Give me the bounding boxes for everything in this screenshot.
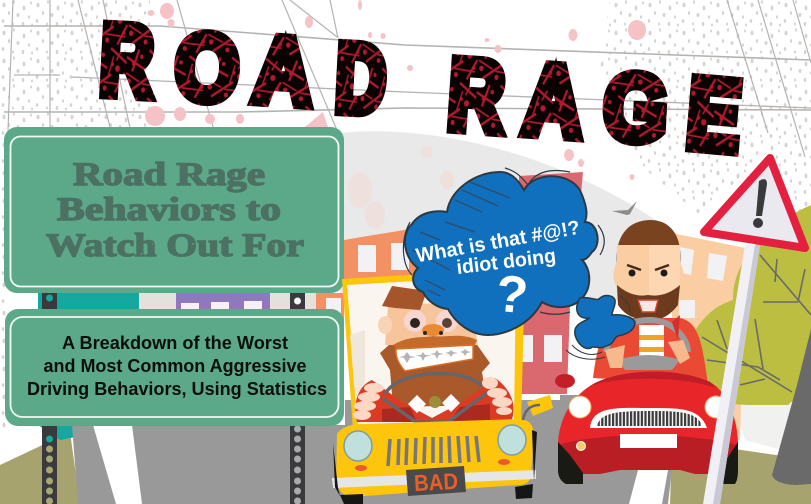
left sign post bbox=[42, 293, 57, 504]
subtitle text: A Breakdown of the Worst bbox=[62, 333, 288, 353]
main title: G bbox=[601, 53, 670, 162]
subtitle text bbox=[27, 333, 327, 399]
bird bbox=[612, 201, 637, 215]
main title: O bbox=[173, 14, 241, 121]
buildings row bbox=[38, 172, 745, 440]
motion lines bbox=[403, 168, 604, 314]
subtitle text: Driving Behaviors, Using Statistics bbox=[27, 379, 327, 399]
hood dark rim bbox=[590, 372, 716, 388]
shirt stripes bbox=[639, 335, 664, 352]
beard bbox=[617, 285, 680, 320]
eyebrows bbox=[627, 265, 669, 270]
arm strap bbox=[672, 315, 680, 340]
wheels bbox=[333, 430, 537, 504]
shirt bands bbox=[382, 404, 490, 422]
lower body bbox=[558, 435, 738, 474]
car hood bbox=[558, 372, 738, 460]
mouth bbox=[638, 300, 658, 312]
warning triangle sign bbox=[704, 158, 805, 248]
number plate bbox=[620, 434, 677, 448]
main title: D bbox=[333, 22, 389, 134]
interior panel bbox=[350, 330, 365, 420]
exclamation mark bbox=[756, 179, 767, 216]
light grey hill bbox=[340, 131, 690, 300]
side mirror bbox=[523, 395, 553, 420]
heading text bbox=[46, 157, 304, 264]
yellow car with angry driver bbox=[333, 268, 553, 504]
heading text: Behaviors to bbox=[57, 192, 281, 228]
building: teal bbox=[38, 293, 139, 440]
subtitle text: and Most Common Aggressive bbox=[44, 356, 306, 376]
building: salmon bbox=[316, 229, 450, 330]
bubble text bbox=[414, 217, 582, 326]
eyes bbox=[628, 270, 668, 276]
building: purple bbox=[176, 293, 270, 313]
hill splatter marks bbox=[348, 146, 454, 229]
speckled texture: top left bbox=[0, 0, 150, 430]
bubble text: idiot doing bbox=[455, 245, 557, 279]
plate text: BAD bbox=[413, 468, 459, 496]
moustache bbox=[393, 336, 477, 351]
pole shadow bbox=[713, 245, 760, 504]
driver jacket bbox=[593, 318, 708, 385]
building: peach bbox=[672, 233, 745, 440]
indicators bbox=[355, 459, 510, 471]
bubble text: What is that #@!? bbox=[414, 217, 582, 267]
eyes bbox=[404, 310, 458, 332]
building: grey block right bbox=[270, 293, 316, 313]
cloud hatching bbox=[412, 182, 510, 296]
main title: E bbox=[682, 58, 745, 173]
warning sign pole bbox=[703, 245, 760, 504]
fist motion lines bbox=[566, 296, 630, 359]
face skin bbox=[385, 302, 478, 345]
heading text: Watch Out For bbox=[46, 228, 304, 264]
ear bbox=[378, 316, 392, 334]
shirt bbox=[639, 325, 664, 357]
grille bbox=[590, 408, 707, 428]
ground left bbox=[0, 432, 80, 504]
steering wheel bbox=[606, 320, 688, 352]
tree trunk bbox=[772, 329, 811, 485]
face bbox=[617, 245, 680, 320]
windshield frame bbox=[342, 268, 525, 430]
tree canopy bbox=[685, 205, 811, 405]
windshield interior bbox=[347, 275, 516, 425]
main title: A bbox=[250, 16, 316, 125]
car body bbox=[336, 419, 534, 497]
lane marking centre bbox=[629, 470, 668, 504]
panel: heading sign bbox=[4, 127, 344, 293]
bumper bbox=[333, 471, 535, 487]
heading text: Road Rage bbox=[73, 157, 265, 193]
headlights bbox=[569, 396, 727, 418]
ground right bbox=[670, 440, 811, 504]
wheels bbox=[558, 442, 738, 484]
speckled texture: top right bbox=[600, 0, 811, 250]
ears bbox=[614, 262, 684, 288]
teeth gaps bbox=[399, 349, 471, 363]
face highlight bbox=[649, 245, 680, 318]
street map lines bbox=[4, 0, 811, 213]
main title: A bbox=[520, 43, 587, 159]
question mark: ? bbox=[493, 265, 531, 326]
main title: R bbox=[444, 39, 508, 154]
right sign post bbox=[290, 293, 305, 504]
driver shirt bbox=[355, 378, 514, 422]
fog light bbox=[576, 442, 586, 450]
collar diamonds bbox=[408, 394, 460, 413]
hair bbox=[617, 220, 680, 265]
hands bbox=[353, 377, 512, 420]
steering wheel bbox=[382, 373, 488, 422]
lane marking left bbox=[93, 425, 142, 504]
hat bbox=[382, 286, 427, 310]
building: pink bbox=[519, 172, 583, 394]
speech cloud bbox=[403, 168, 604, 335]
panel: subtitle sign bbox=[5, 309, 344, 426]
main title bbox=[97, 3, 745, 173]
grille bbox=[388, 436, 479, 466]
small blue fist bbox=[566, 296, 635, 359]
tie knot bbox=[429, 396, 441, 408]
red car with bearded driver bbox=[555, 220, 738, 484]
building: grey block bbox=[139, 293, 176, 313]
white plot right bbox=[730, 395, 811, 458]
nose bbox=[422, 324, 444, 336]
pink paint splatters bbox=[145, 0, 646, 180]
driver beard bbox=[380, 335, 490, 407]
main title: R bbox=[97, 3, 156, 118]
road bbox=[72, 395, 680, 504]
grille slats bbox=[597, 411, 702, 426]
mirror bbox=[555, 374, 575, 388]
tree branches bbox=[702, 255, 811, 392]
exclamation dot bbox=[753, 218, 763, 228]
teeth bbox=[396, 345, 473, 371]
wheel hub bbox=[617, 355, 680, 370]
hands bbox=[605, 340, 690, 368]
headlights bbox=[344, 425, 526, 461]
license plate bbox=[406, 466, 466, 496]
